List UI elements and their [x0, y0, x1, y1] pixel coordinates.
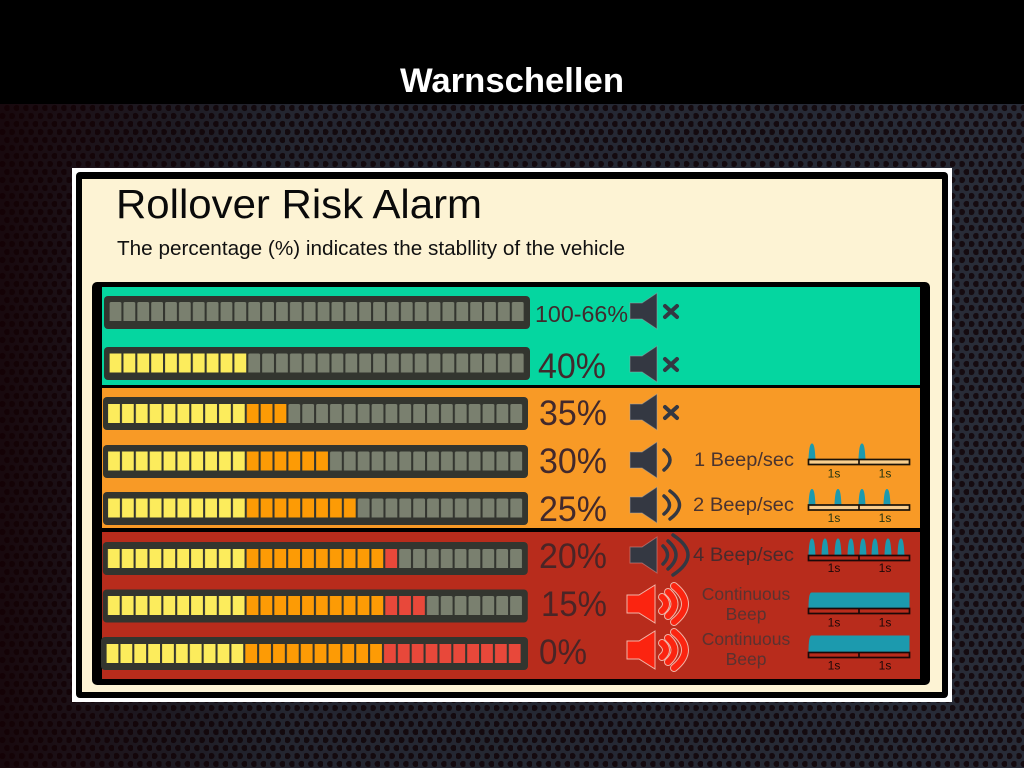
level bar 35% [103, 397, 528, 430]
panel: rollover risk alarm card [72, 168, 952, 702]
level bar 40% [104, 347, 530, 380]
level bar 15% [103, 590, 528, 622]
beep rate labels: Continuous [702, 629, 791, 649]
icon: red alarm speaker 15% [627, 585, 685, 623]
beep rate labels: Beep [726, 649, 766, 669]
timeline: continuous beep 0% [808, 636, 910, 672]
timeline: continuous beep 15% [808, 592, 910, 630]
percent labels [535, 301, 628, 672]
icon: red alarm speaker 0% [627, 631, 685, 669]
percent labels: 15% [541, 585, 607, 624]
card heading: Rollover Risk Alarm [116, 181, 482, 227]
slide title: Warnschellen [400, 62, 624, 100]
beep rate labels: 2 Beep/sec [693, 495, 794, 516]
level bar 20% [103, 542, 528, 575]
level bar 30% [103, 445, 528, 478]
timeline: continuous beep 0%: 1s [828, 658, 840, 672]
timeline: continuous beep 15%: 1s [879, 616, 891, 630]
band: green safe zone [102, 287, 920, 385]
timeline: 4 beeps per second [808, 538, 910, 575]
icon: speaker two waves [630, 487, 680, 523]
percent labels: 20% [539, 537, 607, 576]
beep rate labels: 1 Beep/sec [694, 450, 794, 471]
level bar 100-66% [104, 296, 530, 329]
timeline: 4 beeps per second: 1s [879, 561, 891, 575]
timeline: continuous beep 0%: 1s [879, 658, 891, 672]
percent labels: 100-66% [535, 301, 628, 327]
timeline: 2 beeps per second: 1s [828, 511, 840, 525]
percent labels: 25% [539, 490, 607, 529]
icon: speaker three waves [630, 535, 688, 575]
timeline: 1 beep per second: 1s [879, 466, 891, 480]
timeline: 4 beeps per second: 1s [828, 561, 840, 575]
card subtitle: The percentage (%) indicates the stabllity of the vehicle [117, 238, 625, 260]
level bar 0% [101, 637, 528, 670]
timeline: 2 beeps per second [808, 489, 910, 525]
percent labels: 30% [539, 442, 607, 481]
icon: muted speaker 40% [630, 346, 677, 382]
timeline: 2 beeps per second: 1s [879, 511, 891, 525]
percent labels: 40% [538, 347, 606, 386]
beep rate labels [693, 450, 794, 669]
icon: muted speaker 35% [630, 394, 677, 430]
beep rate labels: 4 Beep/sec [693, 545, 794, 566]
band: red danger zone [102, 532, 920, 679]
timeline: 1 beep per second [808, 444, 910, 480]
band: orange warning zone [102, 388, 920, 528]
percent labels: 35% [539, 394, 607, 433]
percent labels: 0% [539, 633, 587, 672]
timeline: continuous beep 15%: 1s [828, 616, 840, 630]
top black band [0, 0, 1024, 104]
beep rate labels: Continuous [702, 584, 791, 604]
level bar 25% [103, 492, 528, 525]
beep rate labels: Beep [726, 604, 766, 624]
icon: muted speaker 100-66% [630, 293, 677, 329]
table frame [92, 282, 930, 685]
timeline: 1 beep per second: 1s [828, 466, 840, 480]
icon: speaker one wave [630, 442, 670, 478]
